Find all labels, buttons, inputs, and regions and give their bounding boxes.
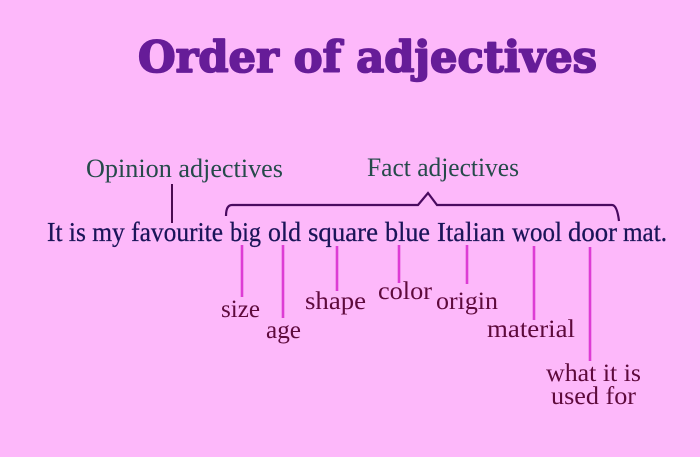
example sentence: blue	[385, 217, 430, 247]
example sentence	[47, 217, 667, 247]
example sentence: square	[308, 217, 378, 247]
line: color	[398, 245, 400, 283]
label: used for: used for	[551, 383, 637, 410]
example sentence: old	[268, 217, 301, 247]
fact adjectives bracket	[226, 193, 619, 221]
example sentence: door	[568, 217, 617, 247]
line: shape	[336, 246, 338, 291]
label: age: age	[266, 317, 301, 344]
label: origin: origin	[436, 288, 499, 315]
opinion pointer line	[171, 184, 173, 223]
category labels	[221, 278, 641, 410]
example sentence: big	[230, 217, 261, 247]
example sentence: Italian	[437, 217, 505, 247]
line: material	[533, 246, 535, 320]
example sentence: wool	[512, 217, 562, 247]
title: Order of adjectives	[138, 33, 597, 83]
example sentence: mat.	[623, 217, 667, 247]
line: origin	[466, 245, 468, 284]
line: size	[241, 245, 243, 297]
label: size: size	[221, 296, 260, 323]
connector lines	[242, 245, 590, 361]
heading: opinion adjectives: Opinion adjectives	[86, 154, 283, 183]
label: shape: shape	[305, 288, 366, 315]
heading: fact adjectives: Fact adjectives	[367, 153, 519, 182]
label: what it is: what it is	[546, 360, 641, 387]
line: age	[282, 245, 284, 318]
label: material: material	[487, 316, 575, 343]
line: what it is used for	[589, 247, 591, 361]
example sentence: It is my favourite	[47, 217, 223, 247]
label: color: color	[378, 278, 433, 305]
